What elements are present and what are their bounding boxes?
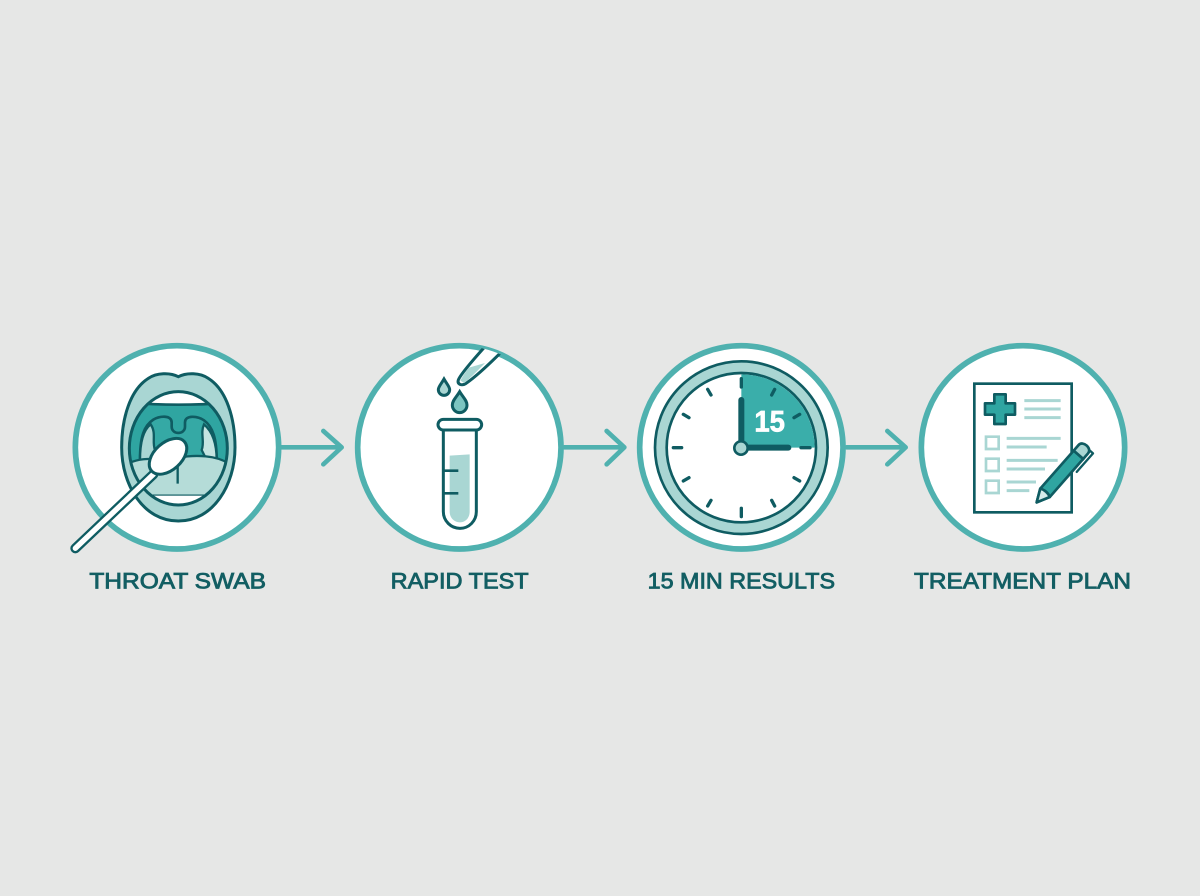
icon: clock face [655, 361, 828, 534]
icon: small drop [438, 379, 450, 395]
arrow: step 2 to 3 [564, 431, 624, 464]
icon: medical cross [985, 394, 1015, 424]
icon: pen [1032, 441, 1094, 509]
label: treatment plan: TREATMENT PLAN [914, 569, 1131, 594]
icon: cotton swab [75, 431, 193, 548]
label: 15 min results: 15 MIN RESULTS [648, 569, 835, 594]
step 1: throat swab [75, 346, 279, 594]
clock wedge: 15 minutes [741, 374, 815, 448]
step 2: rapid test [358, 346, 561, 594]
icon: large drop [452, 392, 467, 413]
clock number: 15 [754, 406, 785, 439]
step 4: treatment plan [914, 346, 1131, 594]
icon: test tube [438, 419, 482, 528]
circle: step 2 [358, 346, 561, 549]
arrow: step 1 to 2 [282, 431, 342, 464]
clock hands [741, 400, 788, 448]
step 3: 15 min results [640, 346, 843, 594]
icon: open mouth [122, 374, 235, 521]
circle: step 1 [75, 346, 279, 549]
icon: pipette [458, 347, 502, 385]
circle: step 3 [640, 346, 843, 549]
circle: step 4 [921, 346, 1125, 549]
icon: document [974, 384, 1072, 512]
arrow: step 3 to 4 [847, 431, 906, 464]
label: throat swab: THROAT SWAB [89, 569, 266, 594]
label: rapid test: RAPID TEST [391, 569, 529, 594]
